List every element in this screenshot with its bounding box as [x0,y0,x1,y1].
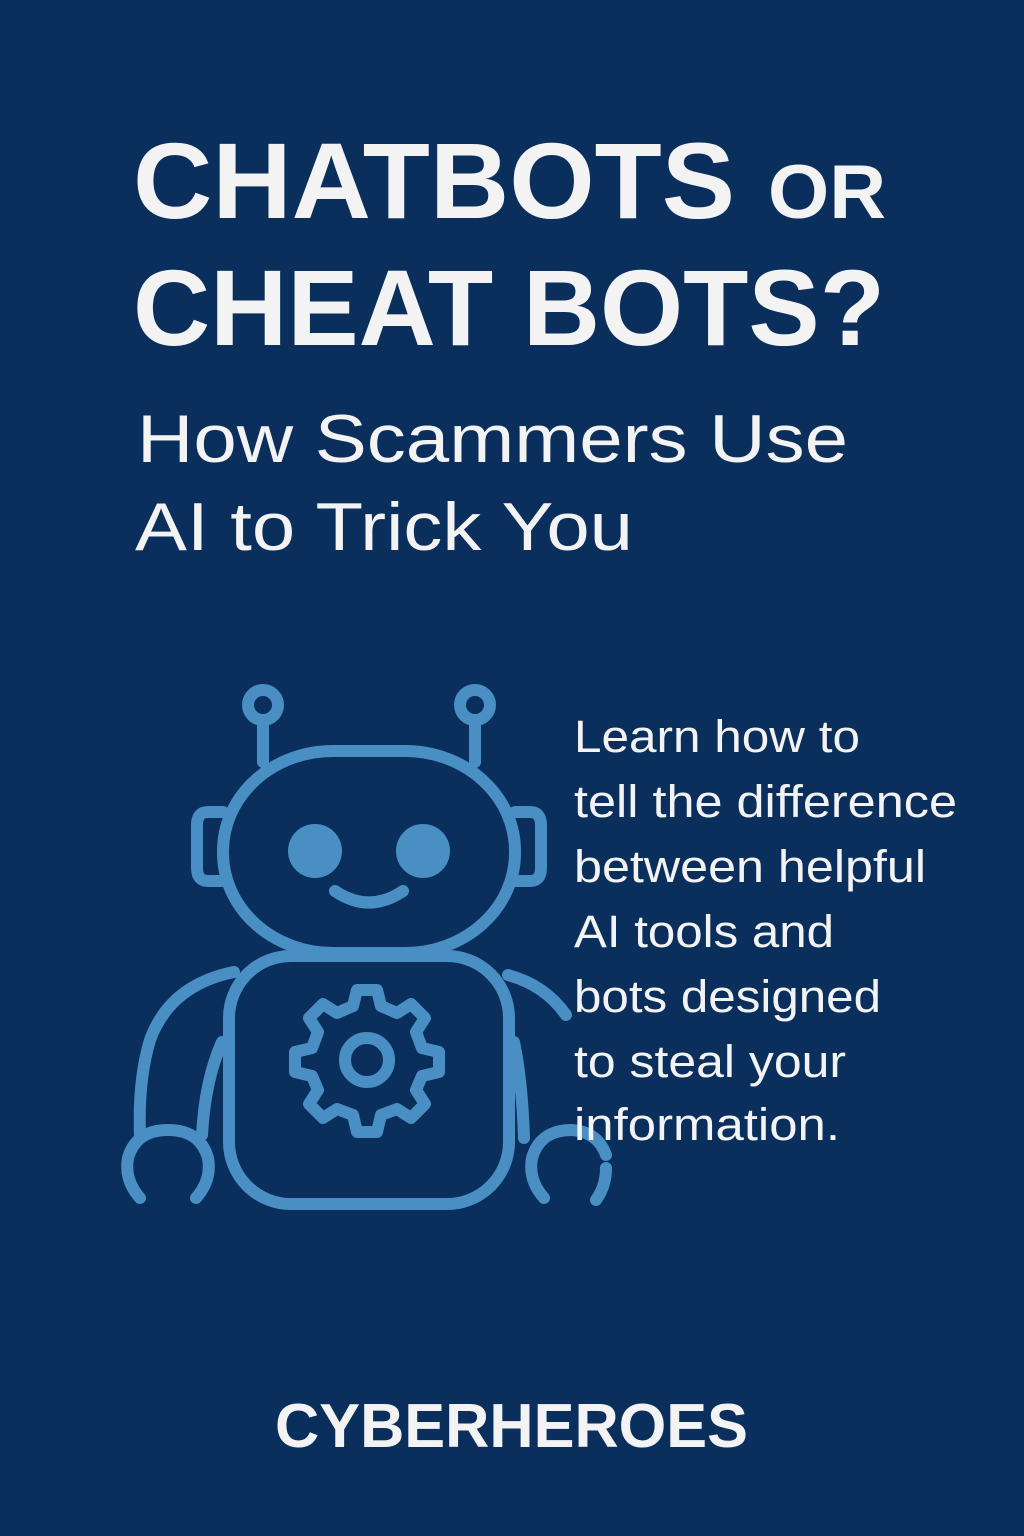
description text: information. [574,1099,840,1150]
description text: tell the difference [574,776,957,827]
subtitle: AI to Trick You [135,489,633,565]
right arm [508,975,606,1200]
left arm [127,972,234,1198]
description text: between helpful [574,841,926,892]
description text [574,711,957,1150]
title: OR [768,150,886,235]
head [223,751,515,953]
antennas [248,690,490,762]
description text: bots designed [574,971,881,1022]
smile [335,891,403,902]
gear [295,990,439,1132]
brand footer: CYBERHEROES [275,1392,748,1461]
eyes [288,824,450,878]
subtitle [135,401,848,565]
icon: robot [127,690,606,1204]
title: CHATBOTS [133,120,735,241]
title: CHEAT BOTS? [133,247,885,368]
description text: Learn how to [574,711,860,762]
description text: to steal your [574,1036,846,1087]
ears [197,812,541,881]
body [229,956,509,1204]
description text: AI tools and [574,906,834,957]
title [133,120,886,368]
subtitle: How Scammers Use [137,401,848,477]
